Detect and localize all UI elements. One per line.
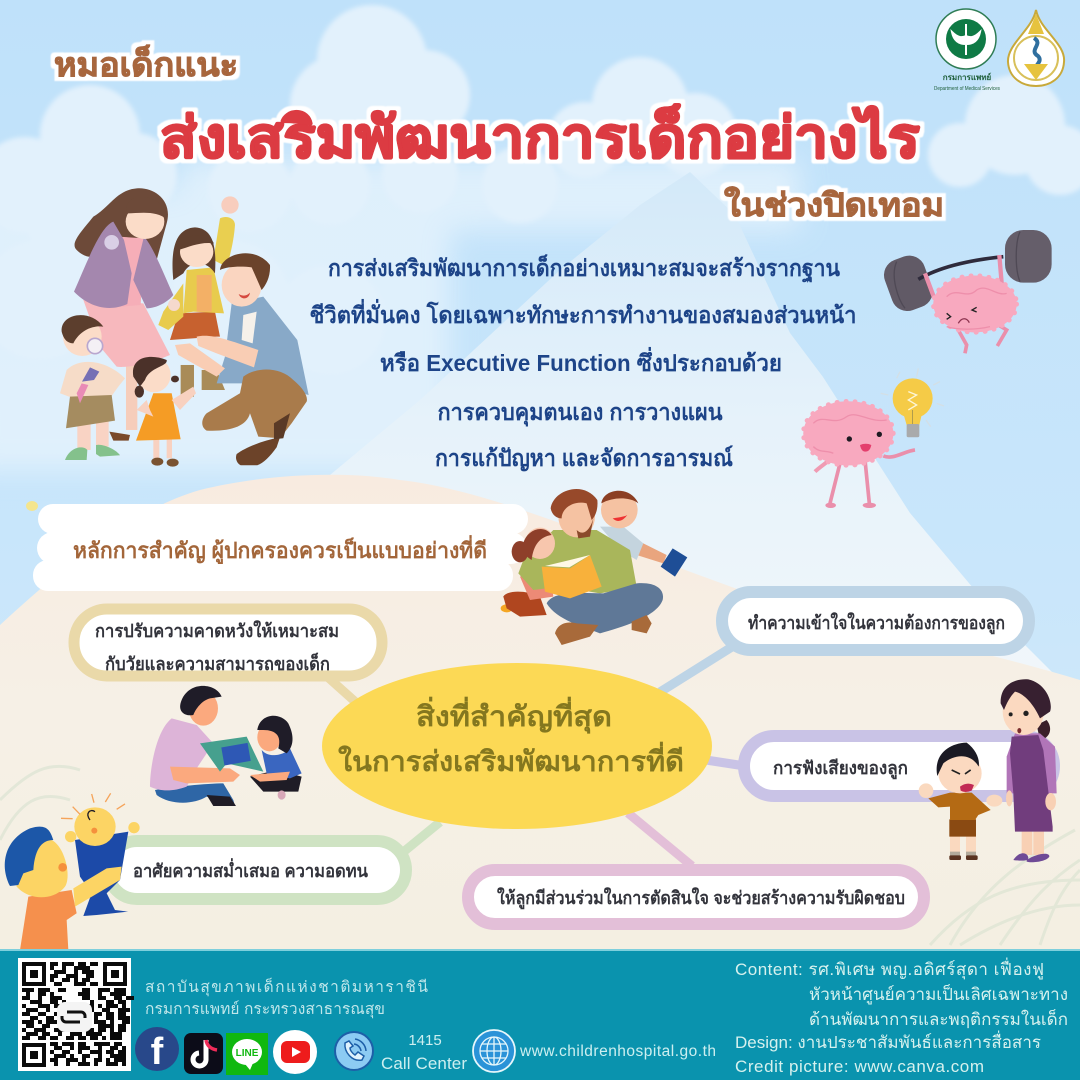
text block: introduction: การแก้ปัญหา และจัดการอารมณ์ — [435, 445, 733, 472]
footer text: credits: ด้านพัฒนาการและพฤติกรรมในเด็ก — [809, 1008, 1068, 1029]
logo: Department of Medical Services seal: Department of Medical Services — [934, 86, 1000, 92]
boy — [919, 743, 1002, 860]
illustration: brain lifting barbell — [879, 230, 1052, 353]
branch: involve children in decisions: ให้ลูกมีส่วนร่วมในการตัดสินใจ จะช่วยสร้างความรับผิดชอบ — [497, 887, 905, 910]
footer text: credits: Credit picture: www.canva.com — [735, 1057, 984, 1076]
connectors from centre to branches — [322, 645, 745, 866]
footer text: institute name: สถาบันสุขภาพเด็กแห่งชาติมหาราชินี — [145, 977, 428, 997]
text block: introduction: ชีวิตที่มั่นคง โดยเฉพาะทักษะการทำงานของสมองส่วนหน้า — [310, 298, 856, 328]
icon: call center phone — [335, 1032, 373, 1070]
text block: introduction — [310, 253, 856, 472]
toddler in orange dress — [133, 357, 196, 467]
icon: tiktok — [184, 1033, 223, 1074]
illustration: parent reading with child — [150, 686, 302, 806]
icon: facebook: f — [151, 1031, 164, 1073]
central ellipse: most important: ในการส่งเสริมพัฒนาการที่ดี — [338, 741, 684, 777]
branch: consistency and patience — [108, 841, 406, 899]
footer text: credits: Design: งานประชาสัมพันธ์และการสื่อสาร — [735, 1030, 1041, 1052]
logo: Department of Medical Services seal: กรมการแพทย์ — [943, 72, 992, 82]
website: www.childrenhospital.go.th — [519, 1043, 716, 1060]
branch: listen to the child: การฟังเสียงของลูก — [773, 758, 908, 780]
icon: facebook — [135, 1027, 179, 1073]
branch: adjust expectations: การปรับความคาดหวังให้เหมาะสม — [95, 620, 339, 641]
subtitle: during school break: ในช่วงปิดเทอม — [724, 186, 944, 223]
illustration: angry mother and boy — [919, 679, 1057, 862]
illustration: family with bubbles — [60, 188, 309, 467]
icon: youtube — [273, 1030, 317, 1074]
call center number — [381, 1032, 467, 1073]
footer text: credits: Content: รศ.พิเศษ พญ.อดิศร์สุดา เฟื่องฟู — [735, 957, 1044, 980]
icon: line — [226, 1033, 268, 1075]
footer text: credits: หัวหน้าศูนย์ความเป็นเลิศเฉพาะทาง — [809, 983, 1068, 1005]
mother — [74, 188, 173, 441]
boy with magnifier — [60, 315, 125, 460]
central ellipse: most important: สิ่งที่สำคัญที่สุด — [416, 696, 612, 734]
call center number: 1415 — [408, 1032, 442, 1049]
text block: introduction: หรือ Executive Function ซึ่งประกอบด้วย — [380, 346, 782, 376]
footer text: institute name — [145, 977, 428, 1019]
branch: involve children in decisions — [468, 870, 924, 924]
callout: key principle: หลักการสำคัญ ผู้ปกครองควรเป็นแบบอย่างที่ดี — [73, 534, 487, 565]
father — [175, 253, 309, 465]
illustration: father lifting baby — [5, 793, 140, 950]
branch: adjust expectations — [74, 609, 382, 676]
icon: line: LINE — [236, 1048, 259, 1059]
branch: adjust expectations: กับวัยและความสามารถของเด็ก — [105, 652, 330, 674]
branch: consistency and patience: อาศัยความสม่ำเสมอ ความอดทน — [133, 858, 369, 881]
text block: introduction: การควบคุมตนเอง การวางแผน — [438, 399, 723, 427]
footer text: credits — [735, 957, 1068, 1076]
logo: children's hospital crest — [1008, 10, 1064, 86]
central ellipse: most important — [322, 663, 712, 829]
icon: globe — [473, 1030, 515, 1072]
branch: understand the child's needs — [722, 592, 1029, 650]
girl — [158, 196, 239, 397]
title: ส่งเสริมพัฒนาการเด็กอย่างไร — [160, 103, 920, 169]
QR code — [18, 958, 134, 1071]
call center number: Call Center — [381, 1054, 467, 1073]
branch: understand the child's needs: ทำความเข้าใจในความต้องการของลูก — [748, 612, 1005, 635]
illustration: brain with light bulb — [803, 368, 944, 508]
logos — [934, 9, 1064, 92]
heading: doctor advises: หมอเด็กแนะ — [54, 44, 238, 83]
footer text: institute name: กรมการแพทย์ กระทรวงสาธารณสุข — [145, 1000, 385, 1019]
logo: Department of Medical Services seal — [934, 9, 1000, 92]
mother in apron — [1001, 679, 1057, 862]
footer band — [0, 949, 1080, 1080]
text block: introduction: การส่งเสริมพัฒนาการเด็กอย่างเหมาะสมจะสร้างรากฐาน — [328, 253, 840, 283]
illustration: father reading with children — [501, 489, 687, 645]
branch: listen to the child — [744, 736, 1054, 796]
callout: key principle — [33, 504, 528, 591]
